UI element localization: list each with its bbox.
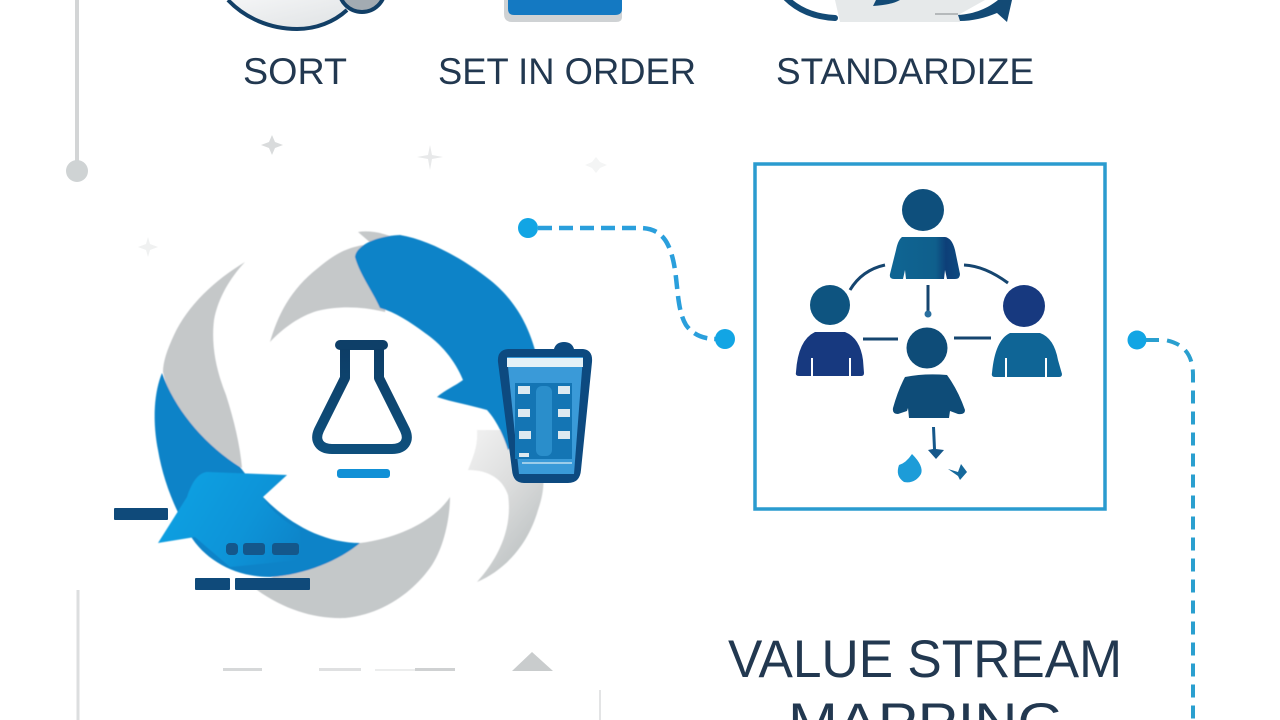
lower timeline rail	[76, 590, 80, 720]
label: set in order: SET IN ORDER	[438, 51, 696, 92]
timeline rail with end node	[66, 0, 88, 182]
down arrow	[928, 427, 944, 459]
faint bottom marks	[223, 652, 601, 720]
person: center	[893, 328, 965, 418]
swirl: upper inner grey arc	[270, 231, 400, 342]
heading: value stream mapping	[728, 630, 1122, 720]
swirl: left grey arc	[163, 262, 245, 468]
swirl: upper blue arrow	[355, 235, 540, 450]
heading: value stream mapping: VALUE STREAM	[728, 630, 1122, 689]
small right arrow	[948, 464, 967, 480]
panel: value stream team diagram	[755, 164, 1105, 509]
person: left	[796, 285, 864, 376]
cycle diagram: PDCA swirl with flask	[155, 231, 544, 618]
connector: dashed link to value stream box	[518, 218, 735, 349]
network links between people	[850, 265, 1008, 339]
icon: standardize, circular arrows	[786, 0, 1012, 22]
flask caption bar	[337, 469, 390, 478]
swirl: right grey arc	[468, 430, 544, 582]
label: standardize: STANDARDIZE	[776, 51, 1034, 92]
icon: set in order, blue tray	[504, 0, 622, 22]
icon: water drop	[898, 454, 922, 482]
person: right	[992, 285, 1062, 377]
placeholder text bars around the cycle	[114, 508, 310, 590]
link end node	[924, 310, 932, 318]
person: top	[890, 189, 960, 279]
icon: sort, magnifier over circle	[228, 0, 385, 29]
swirl: light blue arrow head	[158, 472, 300, 567]
label: sort: SORT	[243, 51, 347, 92]
icon: flask	[317, 340, 407, 449]
decorative sparkles	[138, 135, 607, 257]
connector: dashed link running down the right side	[1128, 330, 1193, 720]
swirl: lower left blue arc	[155, 373, 360, 577]
swirl: lower grey arc	[255, 497, 450, 618]
icon: blue bin / beaker	[498, 342, 592, 483]
